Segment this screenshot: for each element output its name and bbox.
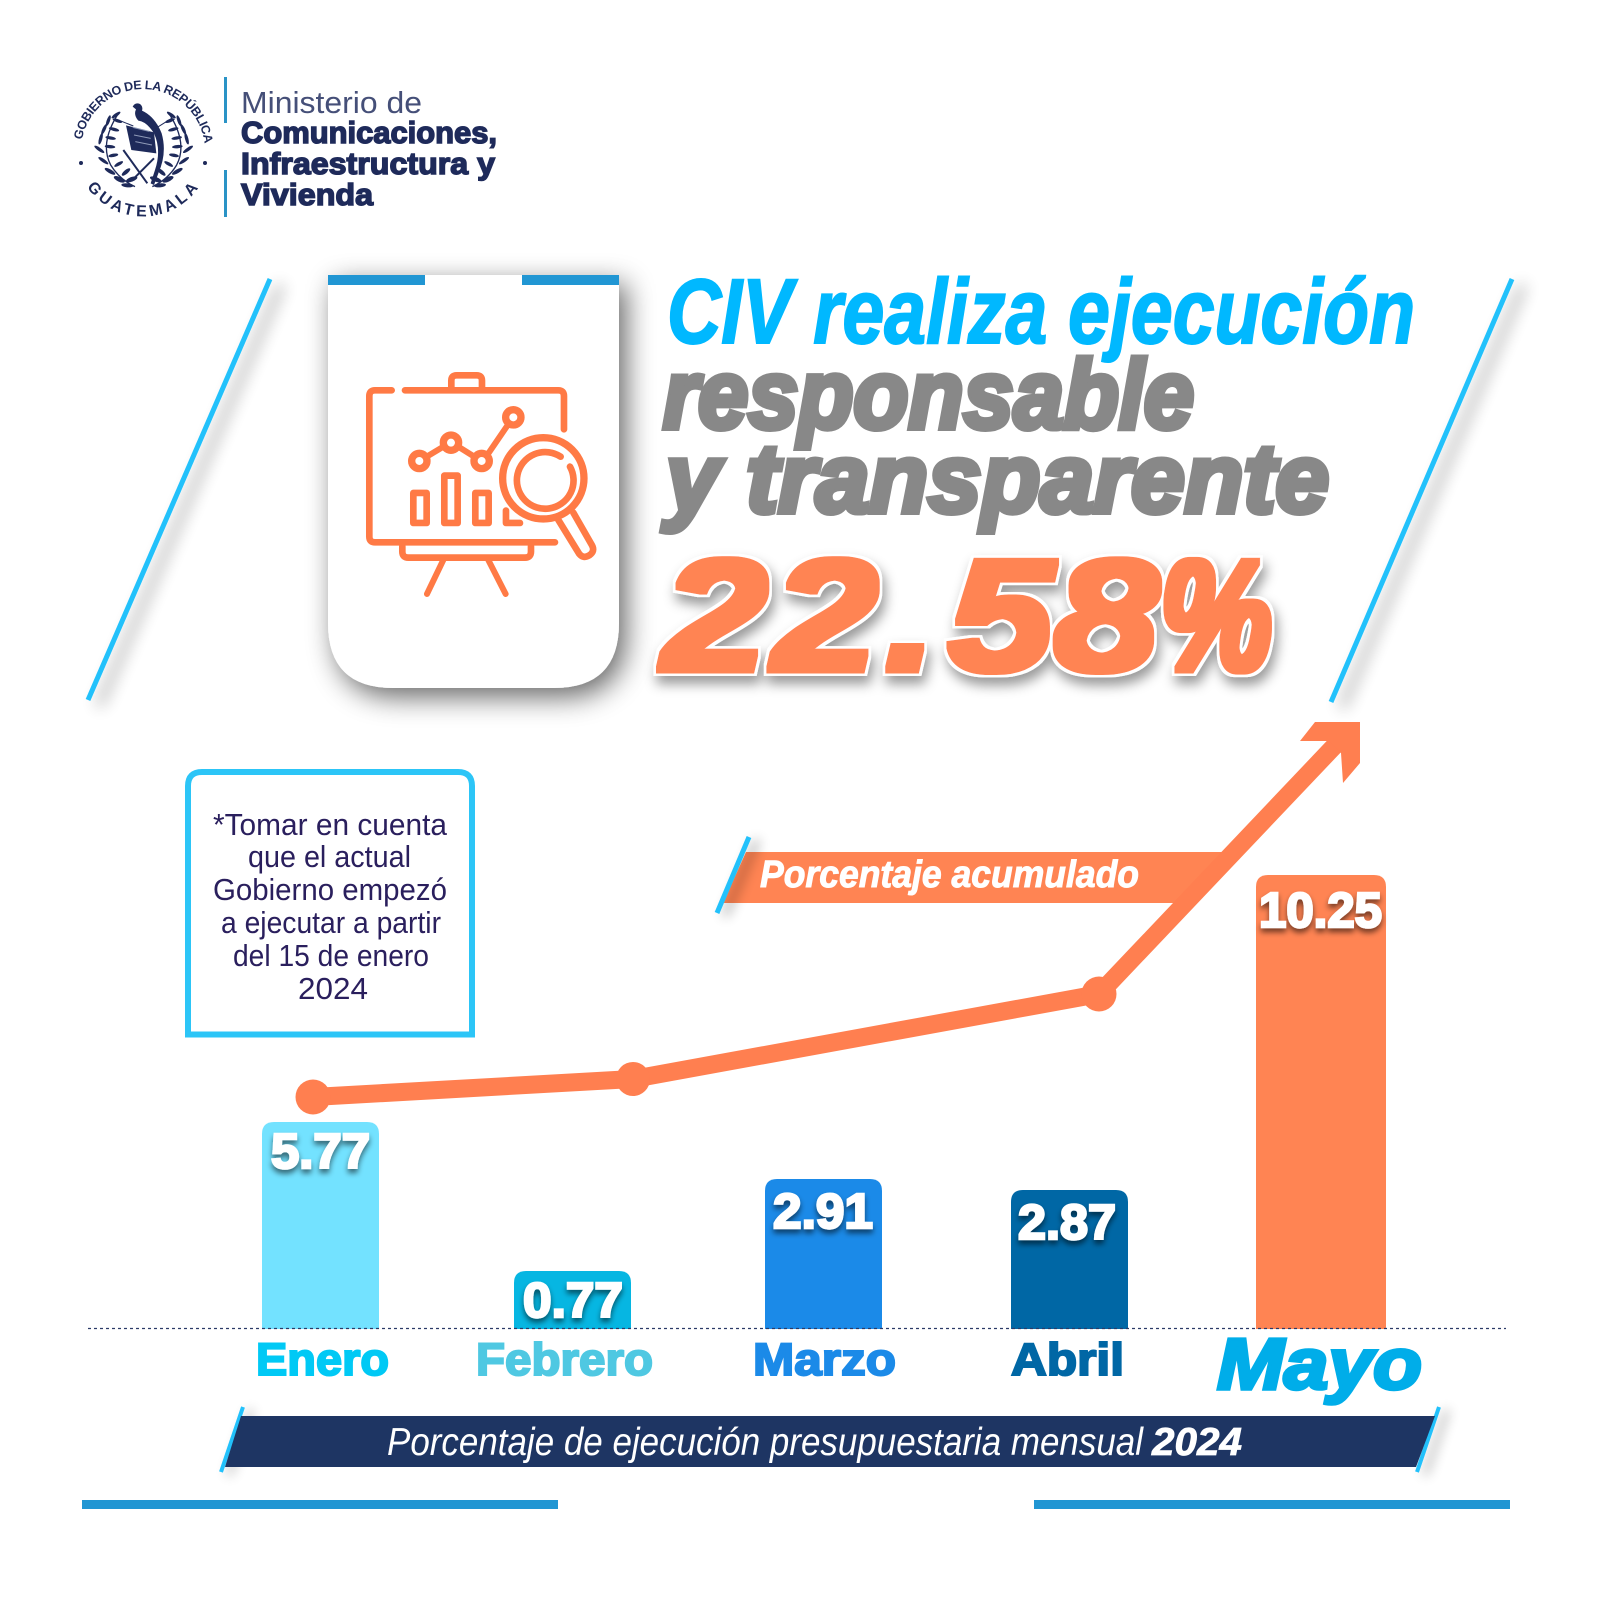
note text: Gobierno empezó (213, 872, 447, 907)
divider lines (224, 77, 227, 217)
card body (328, 275, 619, 688)
banner text: Porcentaje de ejecución presupuestaria mensual (387, 1421, 1144, 1464)
footer banner (221, 1407, 1439, 1472)
month labels: Enero (256, 1334, 389, 1385)
ministry name (241, 85, 497, 212)
value: Enero: 5.77 (271, 1125, 370, 1179)
arrow head (1300, 722, 1360, 783)
ministry name: Vivienda (241, 177, 374, 212)
note text: a ejecutar a partir (221, 905, 441, 940)
bar: Enero (262, 1122, 379, 1329)
logo: Ministerio de Comunicaciones (74, 77, 497, 217)
bar: Mayo (1256, 875, 1386, 1329)
ministry name: Ministerio de (241, 85, 422, 120)
label slash (717, 837, 749, 913)
month labels (256, 1325, 1422, 1405)
title line 3: y transparente (661, 424, 1329, 533)
ministry name: Infraestructura y (241, 146, 496, 181)
note text: que el actual (248, 839, 411, 874)
value: Mayo: 10.25 (1259, 884, 1382, 938)
note text (213, 807, 448, 1006)
slash: left decorative (88, 279, 270, 700)
wreath left (93, 111, 138, 188)
label band (723, 852, 1228, 903)
value: Febrero: 0.77 (523, 1274, 623, 1328)
wreath right (149, 111, 194, 188)
note text: del 15 de enero (233, 938, 429, 973)
headline figure 22.58%: % (1160, 528, 1272, 704)
note text: 2024 (298, 971, 368, 1006)
month labels: Marzo (753, 1334, 896, 1385)
icon: presentation board with chart and magnifier (369, 375, 593, 594)
banner year: 2024 (1151, 1421, 1242, 1464)
ministry name: Comunicaciones, (241, 115, 497, 150)
note text: *Tomar en cuenta (213, 807, 448, 842)
bar: Marzo (765, 1179, 882, 1329)
seal: Gobierno de la República de Guatemala: GOBIERNO DE LA REPÚBLICA (74, 80, 212, 144)
panel: icon card (328, 275, 619, 688)
label: porcentaje acumulado (717, 837, 1228, 913)
title line 2: responsable (663, 340, 1194, 449)
seal: Gobierno de la República de Guatemala: GUATEMALA (89, 182, 198, 216)
label text: Porcentaje acumulado (760, 854, 1139, 896)
value: Marzo: 2.91 (773, 1185, 873, 1239)
callout: note box (188, 772, 472, 1034)
headline figure 22.58%: 22.58 (659, 527, 1159, 703)
month labels: Febrero (476, 1334, 653, 1385)
value: Abril: 2.87 (1018, 1196, 1116, 1250)
card top bars (328, 275, 619, 285)
bar: Abril (1011, 1190, 1128, 1329)
banner body (225, 1416, 1435, 1467)
seal: Gobierno de la República de Guatemala (74, 80, 212, 216)
bar: Febrero (514, 1271, 631, 1329)
banner slashes (221, 1407, 1439, 1472)
month labels: Mayo (1217, 1325, 1422, 1405)
footer rules (82, 1500, 1510, 1509)
slash: right decorative (1331, 279, 1512, 702)
title line 1: CIV realiza ejecución (667, 261, 1415, 363)
title (661, 261, 1415, 533)
line chart: cumulative arrow (296, 722, 1360, 1114)
month labels: Abril (1011, 1334, 1124, 1385)
